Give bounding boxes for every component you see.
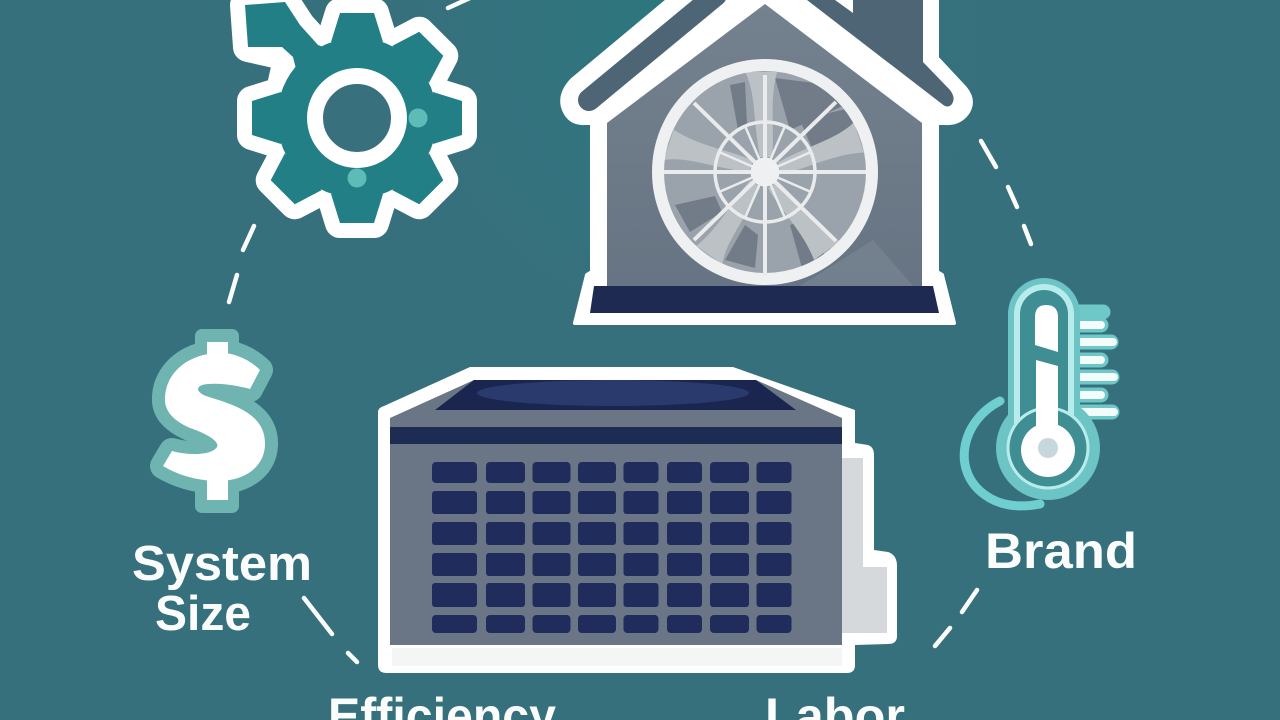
icon: house with fan [562, 0, 971, 323]
icon: outdoor AC unit [378, 367, 897, 673]
fan [658, 65, 872, 279]
label: System Size [132, 537, 312, 641]
base [590, 286, 939, 313]
unit white outline [378, 367, 897, 673]
label: System Size: System [132, 537, 312, 591]
label: System Size: Size [155, 587, 251, 641]
roof right strip and chimney [807, 0, 954, 106]
grille [432, 462, 792, 633]
dark gaps between blades [675, 78, 858, 268]
top panel [435, 380, 796, 410]
icon: thermometer [964, 305, 1114, 506]
dashed connector arcs [229, 0, 1031, 662]
icon: dollar sign [163, 329, 265, 513]
ticks [1078, 312, 1114, 412]
arc around bulb [964, 401, 1040, 506]
mercury [1035, 305, 1058, 352]
roof left strip [589, 0, 716, 100]
side panel [842, 458, 887, 633]
house wall [607, 4, 922, 286]
navy band [390, 427, 842, 444]
unit body [390, 380, 842, 645]
bottom shelf [392, 648, 842, 666]
label: Brand: Brand [985, 523, 1137, 579]
fan spokes [664, 75, 866, 276]
top panel highlight [477, 380, 749, 406]
icon: gear [245, 2, 462, 223]
wall light facet [800, 240, 913, 286]
house white outline [562, 0, 971, 323]
blades [664, 72, 864, 265]
chimney white notch [835, 0, 853, 13]
infographic canvas [134, 0, 1134, 720]
thermometer body [1006, 314, 1090, 490]
